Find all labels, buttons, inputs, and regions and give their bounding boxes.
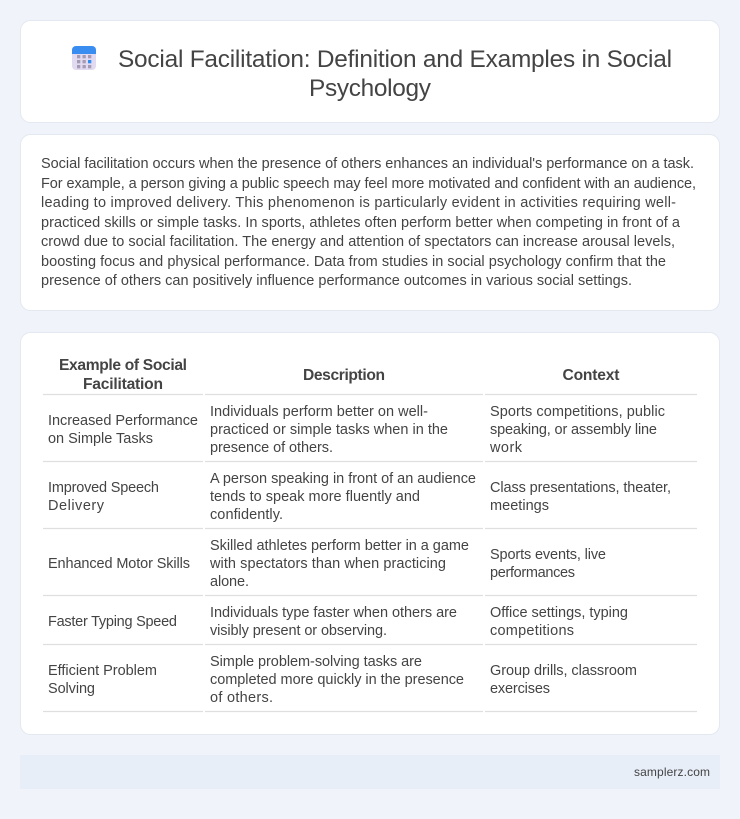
text block: introduction paragraph: practiced skills or simple tasks. In sports, athletes often perform better when competing in front of a (41, 215, 681, 231)
panel: examples table (20, 332, 720, 734)
table header: Facilitation (83, 376, 163, 393)
title: Social Facilitation: Definition and Examples in Social (118, 46, 672, 73)
row: problem solving: Solving (48, 681, 95, 697)
row: problem solving: of others. (210, 690, 273, 706)
footer bar (20, 755, 720, 789)
row: improved speech: meetings (490, 498, 549, 514)
table header: Example of Social (59, 357, 187, 374)
row: faster typing: Individuals type faster when others are (210, 605, 457, 621)
row: enhanced motor skills: Enhanced Motor Skills (48, 556, 190, 572)
table header (59, 357, 620, 393)
row: improved speech: A person speaking in front of an audience (210, 471, 476, 487)
row: increased performance: on Simple Tasks (48, 431, 153, 447)
text block: introduction paragraph: leading to improved delivery. This phenomenon is particularly evident in activities requiring well- (41, 195, 676, 211)
row: problem solving: exercises (490, 681, 550, 697)
panel: introduction (20, 134, 720, 310)
row: faster typing (48, 605, 628, 639)
text block: introduction paragraph: boosting focus and physical performance. Data from studies in social psychology confirm that the (41, 254, 666, 270)
text block: introduction paragraph: crowd due to social facilitation. The energy and attention of spectators can increase arousal levels, (41, 234, 675, 250)
row: faster typing: competitions (490, 623, 574, 639)
row: improved speech: Improved Speech (48, 480, 159, 496)
title (118, 46, 672, 102)
row: faster typing: visibly present or observing. (210, 623, 387, 639)
row: enhanced motor skills: with spectators than when practicing (209, 556, 446, 572)
row: problem solving: Simple problem-solving tasks are (210, 654, 422, 670)
row: improved speech: confidently. (210, 507, 283, 523)
text block: introduction paragraph: presence of others can positively influence performance outcomes in various social settings. (41, 273, 632, 289)
row: improved speech (48, 471, 671, 523)
row: improved speech: tends to speak more fluently and (210, 489, 420, 505)
panel: title card (20, 20, 720, 122)
text block: introduction paragraph: For example, a person giving a public speech may feel more motivated and confident with an audience, (41, 176, 696, 192)
row: increased performance: presence of others. (210, 440, 333, 456)
footer bar: samplerz.com (634, 765, 710, 779)
row: increased performance: Individuals perform better on well- (210, 404, 428, 420)
row: faster typing: Faster Typing Speed (48, 614, 177, 630)
row: enhanced motor skills (48, 538, 606, 590)
row: problem solving: Efficient Problem (48, 663, 157, 679)
table header: Context (562, 367, 620, 384)
row: improved speech: Delivery (48, 498, 105, 514)
row: increased performance: practiced or simple tasks when in the (210, 422, 448, 438)
icon: calendar (72, 46, 96, 70)
row: increased performance: work (489, 440, 523, 456)
row: increased performance: speaking, or assembly line (490, 422, 657, 438)
row: faster typing: Office settings, typing (490, 605, 628, 621)
table header: Description (303, 367, 385, 384)
row: increased performance (48, 404, 665, 456)
text block: introduction paragraph: Social facilitation occurs when the presence of others enhances an individual's performance on a task. (41, 156, 694, 172)
title: Psychology (309, 75, 432, 102)
row: enhanced motor skills: performances (490, 565, 575, 581)
row: increased performance: Increased Performance (48, 413, 198, 429)
row: increased performance: Sports competitions, public (490, 404, 665, 420)
row: problem solving (48, 654, 637, 706)
row: problem solving: completed more quickly in the presence (210, 672, 464, 688)
row: improved speech: Class presentations, theater, (490, 480, 671, 496)
row: problem solving: Group drills, classroom (490, 663, 637, 679)
row: enhanced motor skills: alone. (210, 574, 249, 590)
text block: introduction paragraph (41, 156, 696, 289)
row: enhanced motor skills: Skilled athletes perform better in a game (210, 538, 469, 554)
row: enhanced motor skills: Sports events, live (490, 547, 606, 563)
